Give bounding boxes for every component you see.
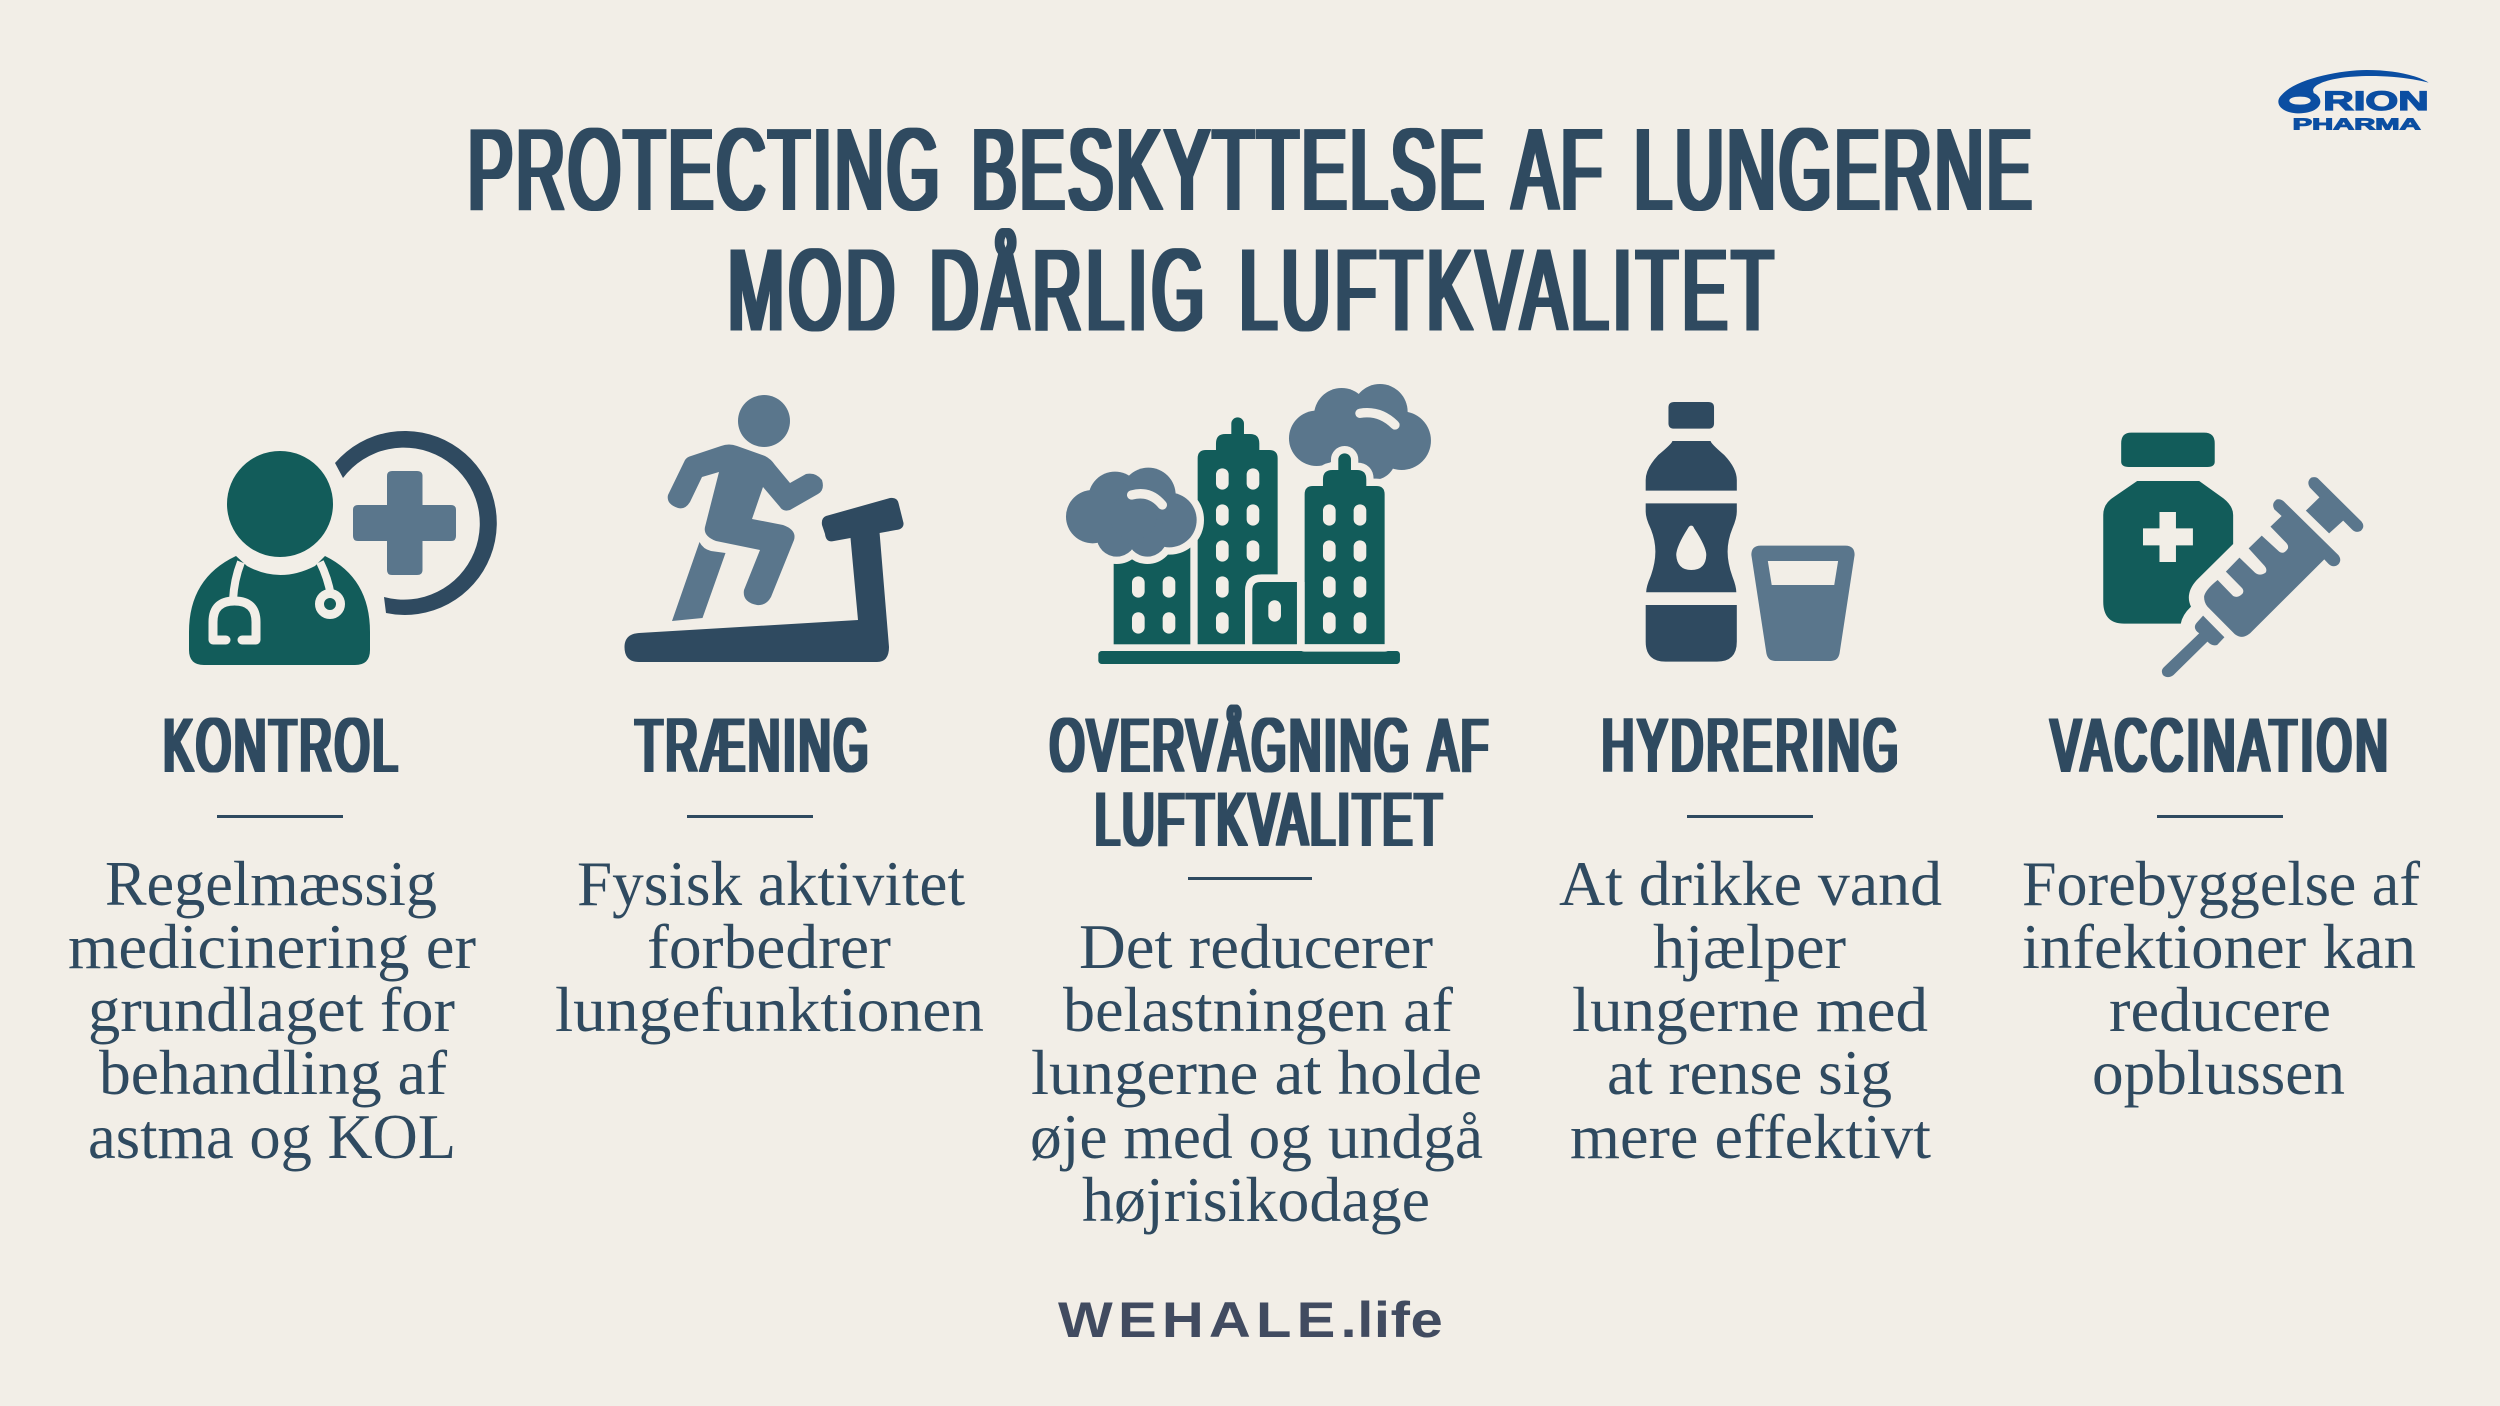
icon: city with smog clouds <box>1066 384 1431 664</box>
panel: overvaagning af luftkvalitet <box>1030 384 1488 1235</box>
icon: doctor with medical cross <box>189 431 497 665</box>
text: hydrering: lungerne med <box>1572 974 1928 1045</box>
text: vaccination: reducere <box>2109 974 2331 1045</box>
title <box>468 106 2032 356</box>
text: overvaagning <box>1030 911 1483 1235</box>
divider: kontrol <box>217 815 343 818</box>
text: hydrering: hjælper <box>1653 911 1846 982</box>
text: traening: forbedrer <box>647 911 891 982</box>
panel: hydrering <box>1559 402 1942 1172</box>
title: PROTECTING BESKYTTELSE AF LUNGERNE <box>468 106 2032 235</box>
divider: hydrering <box>1687 815 1813 818</box>
heading: traening: TRÆNING <box>636 704 868 789</box>
text: overvaagning: øje med og undgå <box>1030 1101 1483 1172</box>
text: traening: Fysisk aktivitet <box>577 848 965 919</box>
text: overvaagning: højrisikodage <box>1082 1164 1430 1235</box>
text: hydrering: At drikke vand <box>1559 848 1942 919</box>
heading: hydrering: HYDRERING <box>1602 704 1898 789</box>
icon: runner on treadmill <box>624 395 904 662</box>
panel: kontrol <box>68 431 497 1172</box>
heading: overvaagning af luftkvalitet: OVERVÅGNING AF <box>1050 704 1488 789</box>
heading: overvaagning af luftkvalitet <box>1050 704 1488 863</box>
divider: traening <box>687 815 813 818</box>
text: hydrering: mere effektivt <box>1570 1101 1931 1172</box>
text: vaccination: opblussen <box>2092 1037 2345 1108</box>
logo: Orion Pharma <box>2278 70 2429 133</box>
title: MOD DÅRLIG LUFTKVALITET <box>728 226 1773 356</box>
text: overvaagning: belastningen af <box>1063 974 1454 1045</box>
text: hydrering: at rense sig <box>1607 1037 1892 1108</box>
panel: vaccination <box>2022 433 2421 1108</box>
text: overvaagning: Det reducerer <box>1079 911 1433 982</box>
text: vaccination <box>2022 848 2421 1108</box>
divider: overvaagning <box>1188 877 1312 880</box>
text: kontrol: medicinering er <box>68 911 476 982</box>
footer: WEHALE.life: WEHALE.life <box>1058 1293 1443 1348</box>
text: vaccination: infektioner kan <box>2022 911 2416 982</box>
text: kontrol: astma og KOL <box>88 1101 456 1172</box>
heading: overvaagning af luftkvalitet: LUFTKVALITET <box>1095 778 1442 863</box>
logo: Orion Pharma: RION <box>2323 86 2429 116</box>
heading: kontrol: KONTROL <box>164 704 397 789</box>
panel: traening <box>555 395 984 1045</box>
text: traening <box>555 848 984 1045</box>
text: hydrering <box>1559 848 1942 1172</box>
text: kontrol: Regelmæssig <box>105 848 437 919</box>
heading: vaccination: VACCINATION <box>2051 704 2387 789</box>
icon: water bottle and glass <box>1646 402 1855 662</box>
divider: vaccination <box>2157 815 2283 818</box>
text: traening: lungefunktionen <box>555 974 984 1045</box>
text: vaccination: Forebyggelse af <box>2022 848 2421 919</box>
icon: medicine bottle and syringe <box>2103 433 2363 677</box>
text: kontrol: behandling af <box>99 1037 448 1108</box>
text: kontrol <box>68 848 476 1172</box>
logo: Orion Pharma: PHARMA <box>2293 116 2421 133</box>
text: overvaagning: lungerne at holde <box>1031 1037 1482 1108</box>
text: kontrol: grundlaget for <box>88 974 455 1045</box>
